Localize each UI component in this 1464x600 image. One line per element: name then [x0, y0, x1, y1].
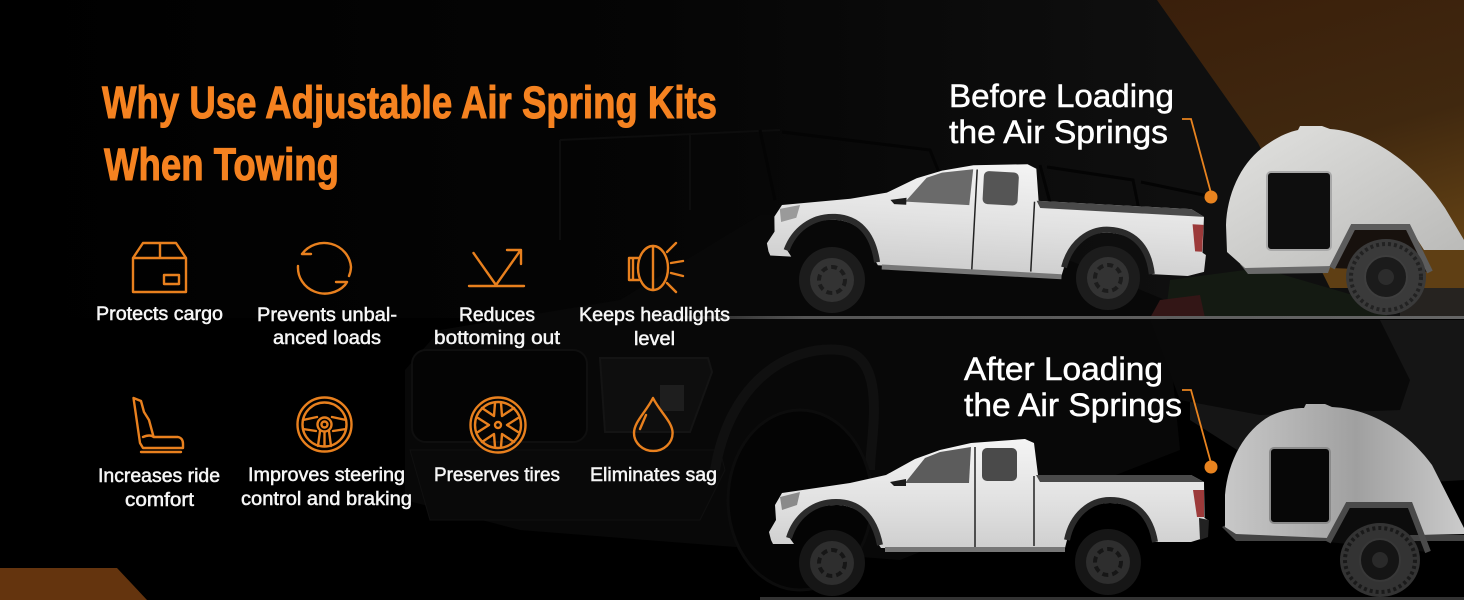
bottom strip: [760, 597, 1464, 600]
truck body: [769, 439, 1209, 552]
trailer wheel: [1340, 523, 1420, 597]
background trailer and asphalt: [1150, 268, 1464, 490]
heading: after loading: After Loading: [964, 351, 1163, 387]
brown corner panel bottom left: [0, 568, 147, 600]
divider line between before and after: [640, 316, 1464, 319]
heading: before loading: the Air Springs: [949, 114, 1168, 150]
label: improves steering control and braking: Improves steering: [248, 465, 405, 486]
label: reduces bottoming out: [434, 305, 561, 349]
label: prevents unbalanced loads: Prevents unbal-: [257, 305, 397, 326]
label: increases ride comfort: comfort: [125, 490, 195, 511]
front wheel: [799, 247, 865, 313]
label: keeps headlights level: [579, 305, 730, 350]
brown corner panel top right: [1157, 0, 1464, 288]
benefit: prevents unbalanced loads: [257, 243, 397, 349]
heading: after loading: the Air Springs: [964, 387, 1182, 423]
trailer window: [1267, 172, 1331, 250]
truck: after loading: [769, 439, 1209, 596]
label: improves steering control and braking: control and braking: [241, 489, 412, 510]
label: prevents unbalanced loads: anced loads: [273, 328, 381, 349]
benefit: keeps headlights level: [579, 243, 730, 350]
benefit: reduces bottoming out: [434, 250, 561, 349]
icon: drop: [634, 398, 673, 451]
title: When Towing: [104, 139, 339, 190]
icon: circular arrows: [298, 243, 351, 294]
rear wheel: [1076, 246, 1140, 310]
icon: box: [133, 243, 186, 292]
label: preserves tires: Preserves tires: [434, 465, 560, 486]
label: reduces bottoming out: bottoming out: [434, 328, 561, 349]
benefit: increases ride comfort: [98, 398, 220, 511]
trailer arch interior: [1328, 505, 1428, 552]
front wheel: [799, 530, 865, 596]
heading: before loading: [949, 78, 1174, 150]
trailer shell: [1226, 126, 1464, 268]
trailer fender: [1328, 505, 1428, 552]
trailer arch interior: [1332, 227, 1430, 272]
icon: steering wheel: [298, 398, 352, 452]
icon: wheel rim: [470, 398, 526, 452]
benefit: eliminates sag: [590, 398, 717, 486]
trailer fender: [1332, 227, 1430, 272]
trailer shell: [1225, 404, 1464, 538]
benefit: preserves tires: [434, 398, 560, 486]
label: increases ride comfort: Increases ride: [98, 466, 220, 487]
benefit: improves steering control and braking: [241, 398, 412, 510]
icon: headlight: [629, 243, 683, 292]
callout pointer: before: [1182, 119, 1218, 204]
label: increases ride comfort: [98, 466, 220, 511]
upper background wash: [0, 0, 1464, 318]
icon: rebound arrow: [469, 250, 524, 286]
title: Why Use Adjustable Air Spring Kits: [102, 77, 717, 128]
callout pointer: after: [1182, 390, 1218, 474]
trailer floor: [1222, 525, 1464, 541]
label: keeps headlights level: level: [634, 329, 675, 350]
trailer: after loading: [1222, 404, 1464, 597]
trailer floor: [1240, 262, 1332, 274]
heading: after loading: [964, 351, 1182, 423]
label: keeps headlights level: Keeps headlights: [579, 305, 730, 326]
benefit: protects cargo: [96, 243, 223, 325]
truck body: [766, 150, 1210, 287]
background truck silhouette: [405, 215, 1180, 590]
trailer wheel: [1346, 239, 1426, 315]
icon: seat: [134, 398, 183, 452]
truck: before loading: [766, 150, 1210, 313]
heading: before loading: Before Loading: [949, 78, 1174, 114]
background fence silhouette: [560, 130, 1213, 240]
rear wheel: [1075, 529, 1141, 595]
label: improves steering control and braking: [241, 465, 412, 510]
trailer: before loading: [1226, 126, 1464, 315]
label: prevents unbalanced loads: [257, 305, 397, 349]
label: eliminates sag: Eliminates sag: [590, 465, 717, 486]
label: reduces bottoming out: Reduces: [459, 305, 535, 326]
trailer window: [1270, 448, 1330, 523]
title: [102, 77, 717, 190]
label: protects cargo: Protects cargo: [96, 304, 223, 325]
